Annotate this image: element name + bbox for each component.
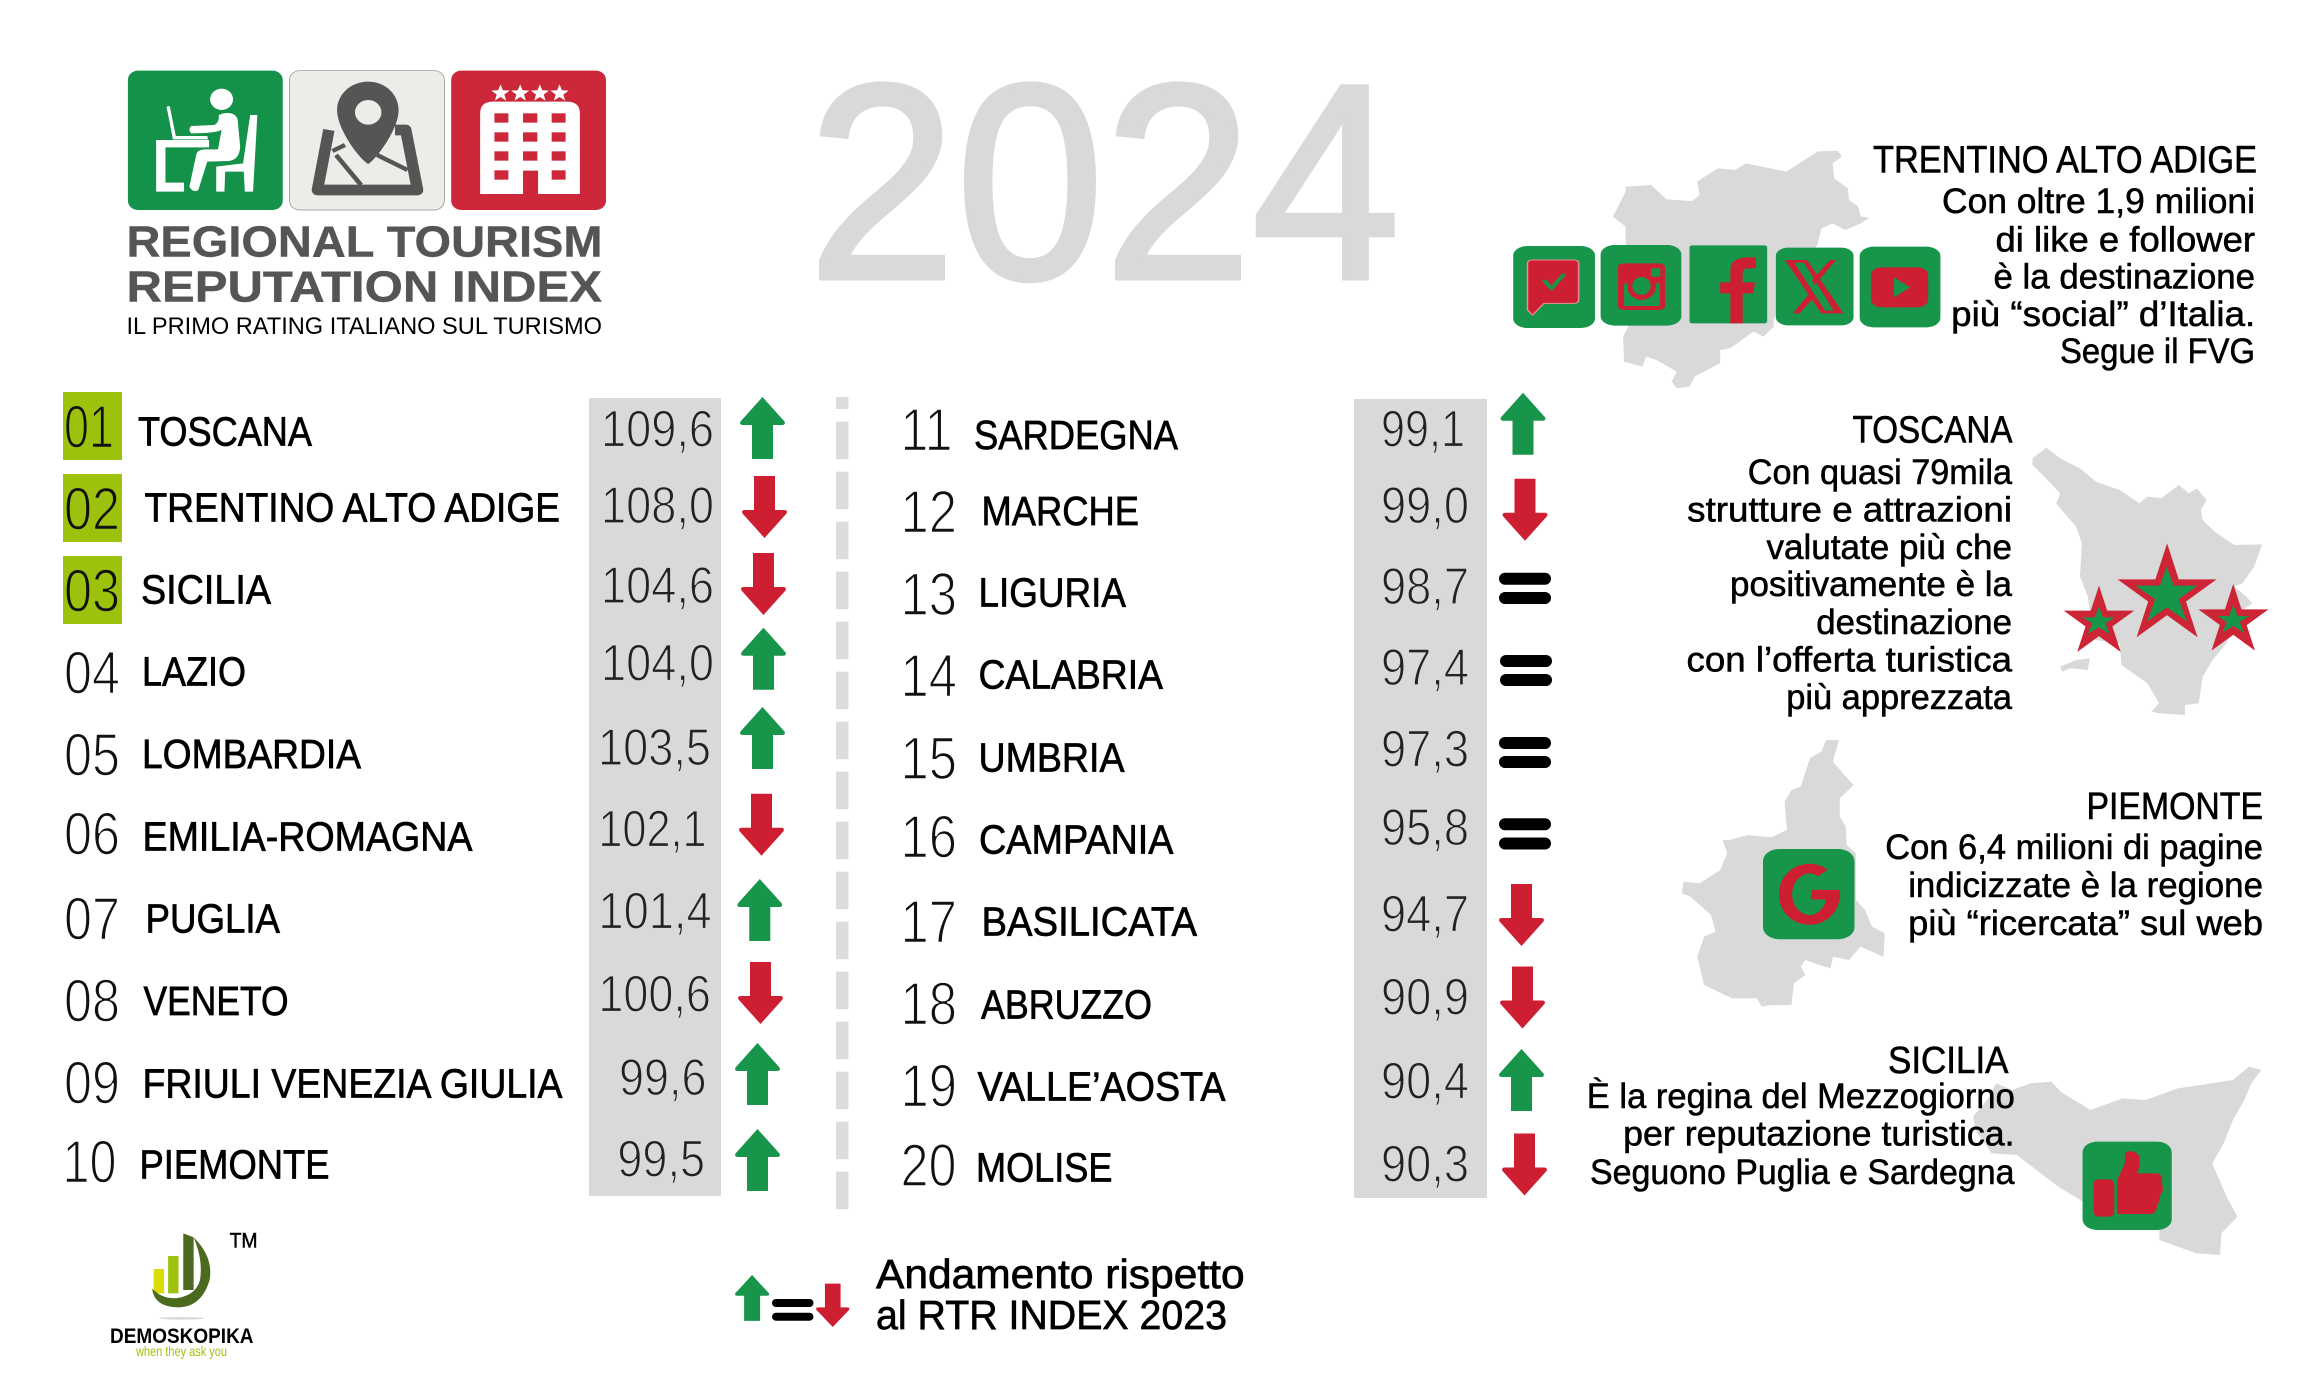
row 04 bbox=[64, 628, 786, 707]
logo title: REPUTATION INDEX bbox=[126, 263, 602, 312]
text block: Con oltre 1,9 milioni bbox=[1942, 182, 2255, 221]
row 11: 99,1 bbox=[1381, 401, 1465, 459]
row 12 bbox=[900, 477, 1547, 546]
icon: up arrow bbox=[735, 1275, 769, 1321]
score column background bbox=[1354, 399, 1487, 1198]
heading: TRENTINO ALTO ADIGE bbox=[1873, 140, 2257, 182]
row 06: EMILIA-ROMAGNA bbox=[142, 814, 473, 860]
panel: Piemonte bbox=[1682, 740, 2263, 1007]
text block: più “social” d’Italia. bbox=[1951, 295, 2255, 334]
row 08 bbox=[64, 962, 783, 1034]
row 04: LAZIO bbox=[142, 648, 246, 694]
row 18 bbox=[900, 966, 1545, 1038]
legend text: al RTR INDEX 2023 bbox=[876, 1292, 1227, 1338]
score column background bbox=[589, 398, 721, 1196]
text block: Segue il FVG bbox=[2060, 332, 2255, 371]
row 19: 90,4 bbox=[1381, 1052, 1469, 1110]
row 17: BASILICATA bbox=[982, 898, 1198, 944]
map: Sicilia bbox=[1973, 1067, 2261, 1255]
row 08: 08 bbox=[64, 967, 120, 1034]
row 15: UMBRIA bbox=[978, 735, 1125, 781]
text block: Con 6,4 milioni di pagine bbox=[1885, 828, 2263, 867]
text block: positivamente è la bbox=[1730, 565, 2013, 604]
row 02 bbox=[63, 474, 787, 543]
row 04: 104,0 bbox=[601, 635, 714, 693]
row 20: 90,3 bbox=[1381, 1136, 1469, 1194]
trademark: TM bbox=[230, 1230, 258, 1253]
legend text bbox=[876, 1251, 1245, 1338]
map: Toscana bbox=[2032, 448, 2262, 715]
row 01: 01 bbox=[64, 394, 114, 461]
icons: social networks bbox=[1513, 245, 1940, 328]
row 14 bbox=[900, 639, 1552, 710]
row 19: 19 bbox=[900, 1053, 957, 1120]
row 12: 12 bbox=[900, 479, 957, 546]
row 07: 101,4 bbox=[598, 882, 712, 940]
row 09 bbox=[64, 1043, 780, 1116]
panel: ranking positions 1-10 bbox=[62, 392, 787, 1196]
row 18: ABRUZZO bbox=[981, 982, 1152, 1028]
row 20: 20 bbox=[900, 1132, 956, 1199]
row 01: 109,6 bbox=[601, 401, 714, 459]
logo: Regional Tourism Reputation Index bbox=[126, 71, 606, 340]
text block: destinazione bbox=[1816, 603, 2012, 642]
row 08: 100,6 bbox=[598, 965, 711, 1023]
text block bbox=[1942, 182, 2255, 371]
icon: equal bbox=[772, 1299, 814, 1321]
logo title bbox=[126, 218, 602, 312]
logo: Demoskopika bbox=[110, 1230, 258, 1359]
legend text: Andamento rispetto bbox=[876, 1251, 1245, 1297]
icon: youtube bbox=[1860, 247, 1940, 327]
row 16: 95,8 bbox=[1381, 799, 1469, 857]
row 09: FRIULI VENEZIA GIULIA bbox=[142, 1060, 563, 1106]
text block: indicizzate è la regione bbox=[1908, 866, 2263, 905]
row 13 bbox=[900, 558, 1551, 628]
text block bbox=[1885, 828, 2263, 943]
row 11 bbox=[900, 393, 1545, 464]
row 02: 108,0 bbox=[601, 477, 714, 535]
icon: four-star hotel on red tile bbox=[451, 71, 606, 210]
text block: strutture e attrazioni bbox=[1687, 491, 2012, 530]
logo tagline: IL PRIMO RATING ITALIANO SUL TURISMO bbox=[126, 313, 602, 340]
row 12: MARCHE bbox=[982, 488, 1139, 534]
panel: Trentino Alto Adige bbox=[1513, 140, 2257, 388]
legend bbox=[735, 1251, 1245, 1338]
row 07: 07 bbox=[64, 885, 120, 952]
heading: PIEMONTE bbox=[2086, 786, 2263, 828]
year heading: 2024 bbox=[808, 26, 1400, 337]
text block: per reputazione turistica. bbox=[1623, 1115, 2015, 1154]
icon: bars and arc bbox=[152, 1233, 210, 1320]
row 14: 97,4 bbox=[1381, 639, 1469, 697]
icon: chat review bbox=[1513, 246, 1595, 328]
row 16: 16 bbox=[900, 804, 957, 871]
row 11: 11 bbox=[900, 397, 952, 464]
text block bbox=[1587, 1077, 2015, 1192]
row 03: 03 bbox=[64, 558, 120, 625]
row 01: TOSCANA bbox=[138, 409, 313, 455]
row 10: 10 bbox=[62, 1128, 116, 1195]
map: Trentino Alto Adige bbox=[1613, 151, 1869, 388]
row 01 bbox=[63, 392, 785, 461]
row 06 bbox=[64, 794, 784, 867]
row 19 bbox=[900, 1049, 1544, 1120]
panel: Toscana bbox=[1686, 410, 2268, 717]
row 07: PUGLIA bbox=[146, 895, 281, 941]
icon: facebook bbox=[1690, 245, 1767, 323]
icon: map pin on grey tile bbox=[290, 71, 444, 210]
text block: più apprezzata bbox=[1786, 678, 2013, 717]
row 05: 103,5 bbox=[598, 719, 711, 777]
row 08: VENETO bbox=[144, 978, 288, 1024]
text block: Con quasi 79mila bbox=[1748, 453, 2013, 492]
icon: instagram bbox=[1601, 245, 1681, 326]
row 13: 13 bbox=[900, 561, 957, 628]
logo title: REGIONAL TOURISM bbox=[126, 218, 602, 267]
row 02: TRENTINO ALTO ADIGE bbox=[144, 485, 560, 531]
row 06: 102,1 bbox=[598, 801, 707, 859]
icon: X bbox=[1776, 248, 1854, 325]
row 18: 90,9 bbox=[1381, 968, 1469, 1026]
icon: thumbs up bbox=[2083, 1142, 2172, 1230]
row 06: 06 bbox=[64, 800, 120, 867]
heading: SICILIA bbox=[1888, 1040, 2009, 1082]
text block: È la regina del Mezzogiorno bbox=[1587, 1077, 2015, 1116]
wordmark: DEMOSKOPIKA bbox=[110, 1325, 254, 1348]
icon: person at laptop on green tile bbox=[128, 71, 283, 210]
row 05: 05 bbox=[64, 722, 120, 789]
row 13: 98,7 bbox=[1381, 558, 1469, 616]
row 12: 99,0 bbox=[1381, 477, 1469, 535]
row 15: 97,3 bbox=[1381, 721, 1469, 779]
text block: è la destinazione bbox=[1994, 258, 2255, 296]
row 09: 09 bbox=[64, 1049, 120, 1116]
row 03: 104,6 bbox=[601, 557, 714, 615]
row 20 bbox=[900, 1132, 1547, 1199]
tagline: when they ask you bbox=[135, 1343, 227, 1359]
row 04: 04 bbox=[64, 640, 120, 707]
map: Piemonte bbox=[1682, 740, 1885, 1007]
row 07 bbox=[64, 879, 782, 952]
icon: down arrow bbox=[816, 1284, 849, 1327]
row 05 bbox=[64, 707, 785, 789]
row 10: 99,5 bbox=[617, 1131, 705, 1189]
text block: Seguono Puglia e Sardegna bbox=[1590, 1153, 2015, 1192]
row 17: 94,7 bbox=[1381, 886, 1469, 944]
row 10: PIEMONTE bbox=[140, 1141, 330, 1187]
row 11: SARDEGNA bbox=[974, 412, 1179, 458]
text block: di like e follower bbox=[1996, 221, 2255, 260]
panel: Sicilia bbox=[1587, 1040, 2261, 1255]
row 14: 14 bbox=[900, 643, 957, 710]
row 15: 15 bbox=[900, 725, 957, 792]
row 13: LIGURIA bbox=[978, 570, 1127, 616]
row 15 bbox=[900, 721, 1551, 792]
text block: con l’offerta turistica bbox=[1686, 641, 2013, 680]
row 03 bbox=[63, 553, 786, 625]
row 10 bbox=[62, 1128, 780, 1195]
row 20: MOLISE bbox=[976, 1145, 1112, 1191]
row 09: 99,6 bbox=[619, 1049, 707, 1107]
row 05: LOMBARDIA bbox=[142, 731, 362, 777]
row 18: 18 bbox=[900, 971, 957, 1038]
icon: three stars bbox=[2064, 543, 2268, 652]
row 03: SICILIA bbox=[141, 567, 272, 613]
heading: TOSCANA bbox=[1852, 410, 2013, 452]
row 17: 17 bbox=[900, 889, 957, 956]
row 16 bbox=[900, 799, 1551, 871]
row 19: VALLE’AOSTA bbox=[978, 1064, 1226, 1110]
panel: ranking positions 11-20 bbox=[900, 393, 1552, 1199]
icon: Google G bbox=[1763, 849, 1855, 939]
row 14: CALABRIA bbox=[978, 652, 1164, 698]
row 02: 02 bbox=[64, 476, 120, 543]
text block: più “ricercata” sul web bbox=[1908, 904, 2263, 943]
row 16: CAMPANIA bbox=[979, 816, 1174, 862]
text block bbox=[1686, 453, 2013, 717]
row 17 bbox=[900, 884, 1544, 956]
text block: valutate più che bbox=[1766, 528, 2012, 567]
